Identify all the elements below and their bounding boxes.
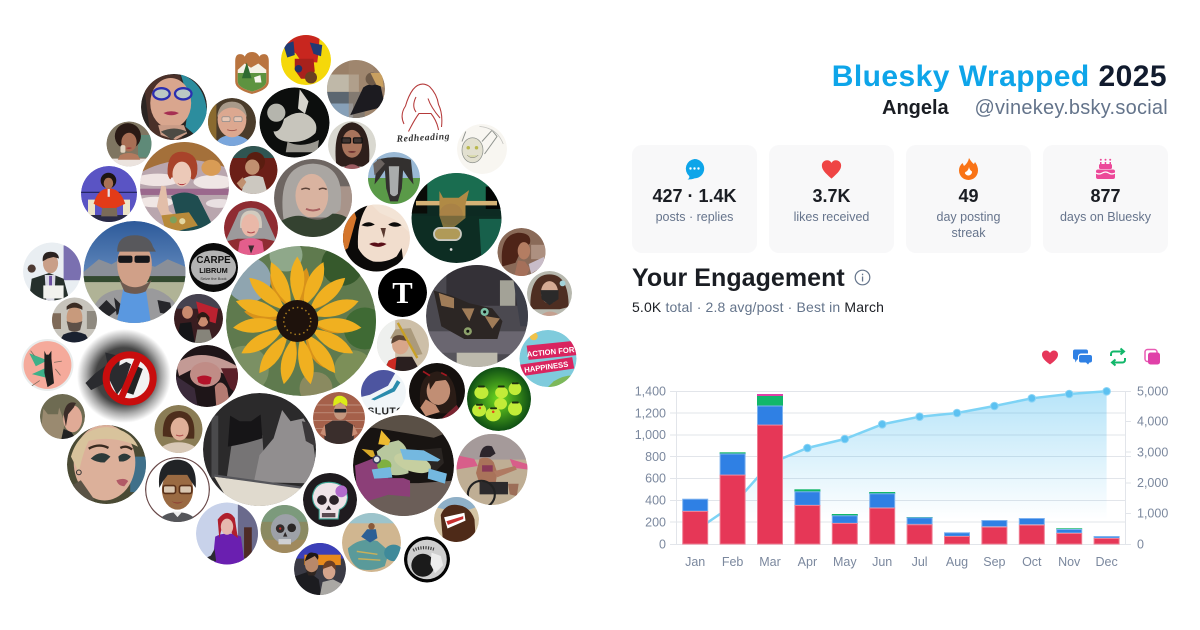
avatar: group of friends (174, 294, 223, 343)
avatar: NYT logo (378, 268, 427, 317)
left axis labels: 1,000 (635, 428, 666, 442)
avatar: Carpe Librum text: LIBRUM (199, 266, 228, 275)
stat label: posts · replies (656, 210, 733, 224)
avatar: woman under straw hat (377, 319, 429, 371)
month labels: Mar (759, 555, 781, 569)
month labels: Jun (872, 555, 892, 569)
month labels: Sep (983, 555, 1006, 569)
month labels: Apr (798, 555, 817, 569)
month labels: Aug (946, 555, 968, 569)
avatar: Redheading logo: Redheading (395, 131, 450, 145)
chart legend icons (1042, 348, 1160, 366)
avatar: woman with neon yellow hair (313, 392, 365, 444)
panel: posting streak (906, 145, 1031, 253)
avatar: stone skull (260, 505, 308, 553)
avatar: neon green rubber ducks (467, 367, 531, 431)
avatar: woman with short brown hair (154, 405, 202, 453)
avatar: snow skier with text (361, 370, 406, 418)
title: Bluesky Wrapped 2025 (832, 60, 1167, 93)
avatar: woman with curly hair in profile (498, 228, 546, 276)
left axis labels (635, 384, 666, 552)
right axis labels (1137, 384, 1168, 552)
right axis labels: 1,000 (1137, 506, 1168, 520)
avatar: tortoiseshell cat (426, 265, 528, 367)
cumulative line (695, 388, 1110, 531)
stat value: 3.7K (812, 186, 851, 206)
avatar: Action for Happiness badge: HAPPINESS (524, 360, 569, 375)
chart grid and axes (670, 391, 1131, 545)
cumulative area (695, 391, 1107, 544)
left axis labels: 200 (645, 516, 666, 530)
month labels: May (833, 555, 857, 569)
avatar: spider-man (281, 35, 331, 85)
month labels (685, 555, 1118, 569)
section heading: Your Engagement (632, 264, 845, 292)
avatar: painted red-haired woman (136, 142, 233, 231)
avatar: woman with afro on phone (106, 122, 152, 168)
left axis labels: 400 (645, 494, 666, 508)
avatar: wheelchair user on beach (456, 434, 528, 508)
avatar: snow skier with text: SLUTC (367, 407, 404, 418)
avatar: two cats at window (203, 393, 316, 506)
left axis labels: 800 (645, 450, 666, 464)
stacked bars: red likes (683, 425, 1119, 544)
stat value: 877 (1090, 186, 1121, 206)
panel: likes received (769, 145, 894, 253)
icon: legend heart (1042, 350, 1058, 364)
stat label: day posting (937, 210, 1000, 224)
avatar: red hair in purple shirt (196, 502, 258, 564)
icon: speech bubble (686, 159, 704, 180)
avatar: woman with black mask (527, 271, 572, 316)
display name: Angela (882, 97, 949, 119)
right axis labels: 3,000 (1137, 446, 1168, 460)
avatar: Carpe Librum text: CARPE (196, 255, 231, 266)
right axis labels: 2,000 (1137, 476, 1168, 490)
avatar: man in suit (23, 242, 81, 300)
avatar: cheshire cat sketch (457, 124, 507, 174)
avatar: two people in front of sign (294, 543, 346, 595)
avatar: floral skull sticker (303, 473, 357, 527)
right axis labels: 4,000 (1137, 414, 1168, 428)
avatar: gray-haired woman (274, 159, 352, 237)
avatar: NYT logo: T (392, 276, 413, 310)
left axis labels: 600 (645, 472, 666, 486)
month labels: Feb (722, 555, 743, 569)
avatar: mermaid sand sculpture (342, 513, 403, 572)
panel: posts and replies (632, 145, 757, 253)
avatar: black and white statue (260, 88, 330, 158)
avatar: bride black and white (404, 536, 450, 582)
right axis labels: 5,000 (1137, 384, 1168, 398)
icon: legend reposts (1111, 348, 1125, 366)
avatar: Redheading logo (395, 84, 450, 145)
avatar: woman with teal hair and blue glasses (141, 74, 207, 140)
avatar: dark-haired woman resting on hand (409, 363, 465, 419)
stat value: 49 (958, 186, 979, 206)
avatar: hand shield badge (235, 52, 269, 94)
avatar: blonde woman selfie (67, 425, 146, 504)
stacked bars: blue replies (683, 406, 1119, 538)
avatar: crochet plush on seat (353, 415, 454, 516)
panel: days on Bluesky (1043, 145, 1168, 253)
stat label: likes received (794, 210, 869, 224)
stat label: days on Bluesky (1060, 210, 1151, 224)
avatar: older woman with glasses (208, 98, 256, 146)
avatar: woman with curly hair and dark glasses (328, 121, 376, 169)
stacked bars: green reposts (720, 396, 1082, 529)
month labels: Nov (1058, 555, 1081, 569)
avatar: bearded man (52, 298, 97, 342)
avatar: mid-century cat on pink (22, 339, 74, 391)
engagement summary: 5.0K total · 2.8 avg/post · Best in March (632, 299, 884, 315)
stat label (937, 210, 1000, 240)
stat label: streak (951, 226, 986, 240)
icon: info (854, 270, 870, 286)
stacked bars: pink quotes (757, 394, 783, 396)
left axis labels: 0 (659, 538, 666, 552)
avatar: woman in pink (224, 201, 278, 255)
right axis labels: 0 (1137, 538, 1144, 552)
avatar: Domo plush (434, 497, 479, 542)
avatar: Action for Happiness badge: ACTION FOR (526, 345, 575, 359)
engagement combo chart (635, 384, 1168, 569)
avatar: cat in green bag (412, 173, 502, 263)
avatar: person by window (327, 60, 385, 118)
left axis labels: 1,400 (635, 384, 666, 398)
avatar: pale stylised face (343, 204, 410, 272)
month labels: Oct (1022, 555, 1042, 569)
icon: heart (822, 160, 842, 178)
avatar: sunflower (226, 246, 376, 396)
avatar: bitmoji with glasses (146, 458, 209, 522)
avatar: Carpe Librum text: Seize the Book (200, 276, 227, 281)
avatar: goat (368, 152, 420, 204)
avatar bubble cluster (22, 35, 576, 595)
avatar: Action for Happiness badge (520, 330, 576, 387)
icon: legend replies (1073, 350, 1092, 364)
left axis labels: 1,200 (635, 406, 666, 420)
avatar: woman with tabby cat (40, 394, 85, 439)
month labels: Jul (912, 555, 928, 569)
avatar: Carpe Librum text (189, 243, 238, 292)
avatar: man in red jacket (81, 166, 137, 223)
icon: legend quotes (1145, 350, 1160, 364)
avatar: no-entry pin with shadow (77, 329, 171, 423)
month labels: Jan (685, 555, 705, 569)
avatar: toddler (230, 146, 278, 194)
handle: @vinekey.bsky.social (974, 97, 1168, 119)
stat value: 427 · 1.4K (652, 186, 737, 206)
avatar: man with cap and sunglasses (84, 221, 186, 323)
icon: cake (1096, 158, 1115, 179)
avatar: red lips under hat (176, 345, 238, 407)
month labels: Dec (1095, 555, 1118, 569)
icon: flame (959, 158, 978, 180)
